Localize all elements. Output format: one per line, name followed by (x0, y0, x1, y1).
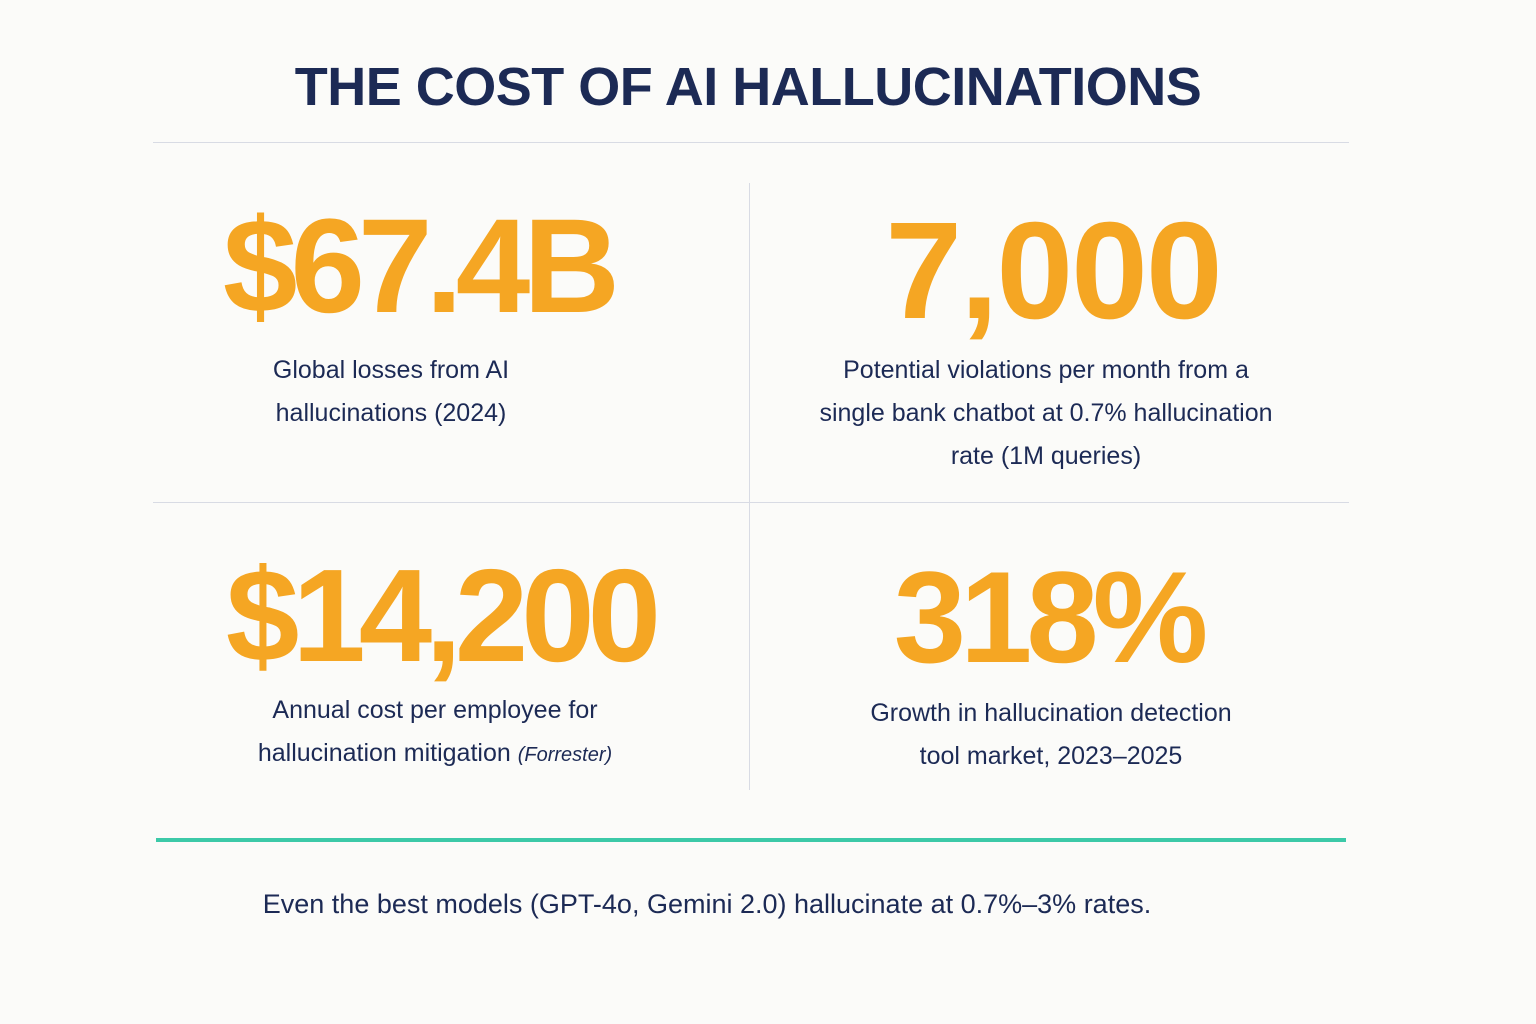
description: violations: single bank chatbot at 0.7% hallucination (819, 399, 1273, 427)
big number: $67.4B: $67.4B (223, 192, 613, 341)
stat: violations (819, 194, 1273, 470)
description: market growth (870, 699, 1232, 770)
description: violations (819, 356, 1273, 470)
description: global losses (273, 356, 509, 427)
description: annual cost: Annual cost per employee for (272, 696, 598, 724)
footer note: Even the best models (GPT-4o, Gemini 2.0) hallucinate at 0.7%–3% rates. (263, 889, 1151, 919)
description: market growth: Growth in hallucination detection (870, 699, 1232, 727)
description: global losses: Global losses from AI (273, 356, 509, 384)
stat: annual cost (226, 542, 656, 767)
description: annual cost: hallucination mitigation (Forrester) (258, 739, 612, 767)
description: global losses: hallucinations (2024) (276, 399, 506, 427)
big number: 318%: 318% (894, 544, 1202, 690)
description: market growth: tool market, 2023–2025 (920, 742, 1182, 770)
stat: global losses (223, 192, 614, 427)
big number: $14,200: $14,200 (226, 542, 654, 689)
title: THE COST OF AI HALLUCINATIONS (295, 57, 1201, 117)
description: violations: rate (1M queries) (951, 442, 1141, 470)
stat: market growth (870, 544, 1232, 770)
description: violations: Potential violations per month from a (843, 356, 1249, 384)
big number: 7,000: 7,000 (885, 194, 1221, 348)
description: annual cost (258, 696, 612, 767)
